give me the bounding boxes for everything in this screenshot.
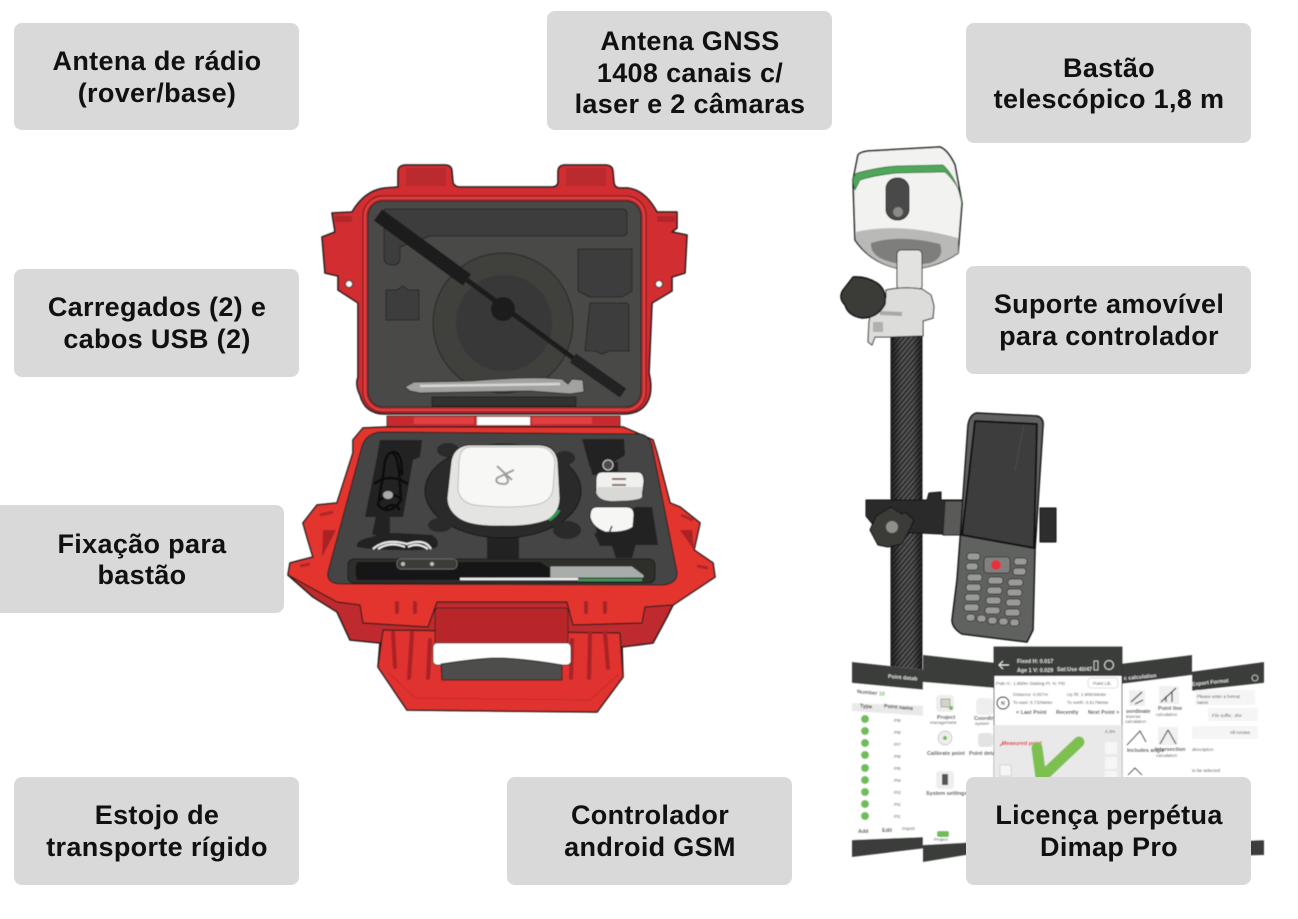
case lid: [322, 165, 687, 414]
app screen: stakeout map: N: [1001, 701, 1005, 707]
app screen: point database: Pt2: [894, 802, 901, 807]
app screen: export format: Export Format: [1192, 678, 1229, 688]
label: android controller: [507, 777, 792, 885]
app screen: stakeout map: 4.3m: [1105, 729, 1115, 734]
tray with controller handle and rod: [348, 559, 655, 583]
label: android controller: Controlador: [571, 800, 729, 830]
app screen: calculation menu: Point line: [1158, 706, 1182, 712]
app screen: point database: Pt9: [894, 718, 901, 723]
label: pole mount: [0, 505, 284, 613]
label: pole mount: bastão: [97, 560, 187, 590]
controller bracket: [866, 492, 1056, 547]
app screen: stakeout map: < Last Point: [1016, 710, 1047, 716]
app screen: export format: Please enter a format: [1197, 694, 1241, 699]
app screen: stakeout map: Pole H.: 1.800m Staking Pt. N: Pt0: [996, 681, 1066, 686]
label: android controller: android GSM: [564, 832, 736, 862]
label: radio antenna: (rover/base): [78, 78, 236, 108]
green check mark: [1037, 742, 1079, 778]
app screen: project menu: Calibrate point: [927, 751, 965, 757]
label: telescopic pole: Bastão: [1063, 53, 1155, 83]
label: GNSS antenna: Antena GNSS: [600, 26, 780, 56]
app screen: stakeout map: To east: 0.732Meter: [1013, 700, 1053, 705]
app screen: point database: Pt6: [894, 754, 901, 759]
app screen: export format: [1190, 662, 1264, 857]
label: controller holder: Suporte amovível: [994, 289, 1224, 319]
illustration: software screenshots: [852, 647, 1264, 872]
keypad: [964, 553, 1027, 626]
handle: [378, 630, 623, 712]
label: controller holder: para controlador: [999, 321, 1219, 351]
app screen: export format: to be selected: [1192, 768, 1221, 773]
app screen: calculation menu: Intersection: [1155, 747, 1186, 753]
app screen: project menu: Point details: [969, 751, 1001, 757]
knob: [841, 277, 885, 318]
label: hard case: [14, 777, 299, 885]
app screen: calculation menu: [1120, 655, 1192, 870]
label: radio antenna: Antena de rádio: [53, 46, 261, 76]
app screen: export format: description: [1192, 747, 1214, 752]
illustration: rover pole with receiver and controller: [841, 147, 1056, 670]
app screen: stakeout map: Point Lib.: [1093, 681, 1112, 686]
app screen: point database: Pt5: [894, 766, 901, 771]
antenna cradle: [425, 443, 581, 539]
rover head: [841, 147, 962, 345]
app screen: calculation menu: calculation: [1156, 712, 1178, 717]
label: pole mount: Fixação para: [57, 529, 227, 559]
app screen: stakeout map: Age 1 V: 0.029: [1017, 668, 1053, 674]
label: GNSS antenna: 1408 canais c/: [597, 58, 783, 88]
app screen: point database: Add: [858, 829, 868, 835]
label: controller holder: [966, 266, 1251, 374]
green band: [853, 165, 962, 203]
app screen: calculation menu: inverse: [1126, 714, 1141, 719]
app screen: stakeout map: Fixed H: 0.017: [1017, 659, 1053, 665]
case hinge: [387, 416, 620, 428]
base foam: [328, 432, 677, 585]
app screen: calculation menu: oordinate: [1126, 709, 1151, 715]
app screen: point database: Type: [860, 703, 872, 710]
label: software licence: Licença perpétua: [995, 800, 1223, 830]
app screen: stakeout map: Next Point >: [1088, 710, 1119, 716]
app screen: stakeout map: Sat:Use 40/47: [1057, 667, 1092, 673]
lid foam: [368, 201, 641, 407]
case base: [288, 427, 715, 712]
label: telescopic pole: telescópico 1,8 m: [994, 84, 1224, 114]
app screen: project menu: System settings: [926, 791, 967, 797]
app screen: project menu: Project: [934, 837, 949, 842]
app screen: stakeout map: [994, 647, 1122, 872]
app screen: point database: Pt3: [894, 790, 901, 795]
label: hard case: transporte rígido: [46, 832, 268, 862]
app screen: point database: Point name: [884, 704, 913, 712]
app screen: point database: Pt4: [894, 778, 901, 783]
label: chargers and cables: Carregados (2) e: [48, 292, 266, 322]
app screen: project menu: Project: [937, 715, 955, 721]
label: software licence: Dimap Pro: [1040, 832, 1178, 862]
app screen: calculation menu: Includes angle: [1127, 748, 1164, 754]
antenna stem recess: [487, 535, 519, 560]
app screen: point database: [852, 662, 926, 857]
base rim: [288, 427, 715, 627]
app screen: project menu: system: [975, 721, 990, 726]
label: chargers and cables: [14, 269, 299, 377]
app screen: calculation menu: calculation: [1156, 753, 1178, 758]
app screen: point database: Point datab: [888, 674, 918, 683]
app screen: point database: Number 10: [857, 689, 885, 698]
chargers: [582, 439, 658, 558]
label: GNSS antenna: laser e 2 câmaras: [575, 89, 805, 119]
label: software licence: [966, 777, 1251, 885]
app screen: export format: name: [1197, 700, 1209, 705]
label: hard case: Estojo de: [95, 800, 219, 830]
cable recess: [357, 440, 438, 550]
app screen: stakeout map: Distance: 0.957m: [1013, 692, 1048, 697]
app screen: point database: Import: [902, 826, 916, 831]
stem: [897, 250, 922, 290]
illustration: open red hard case: [288, 165, 715, 712]
app screen: stakeout map: Recently: [1056, 710, 1078, 716]
clamp: [868, 288, 934, 345]
controller handset: [952, 413, 1043, 642]
app screen: point database: Pt8: [894, 730, 901, 735]
app screen: point database: Edit: [882, 828, 892, 834]
label: telescopic pole: [966, 23, 1251, 143]
app screen: stakeout map: Measured point: [1002, 741, 1042, 747]
tube in lid: [405, 378, 584, 394]
GNSS antenna: [447, 445, 560, 526]
app screen: calculation menu: calculation: [1125, 719, 1147, 724]
app screen: export format: All Arrows: [1230, 730, 1251, 735]
telescopic pole in lid: [378, 215, 623, 393]
carbon pole: [891, 330, 922, 670]
app screen: project menu: management: [930, 720, 957, 725]
app screen: stakeout map: Up fill: 1.9091Meter: [1067, 692, 1107, 697]
foam slot below tube: [432, 397, 576, 406]
label: GNSS antenna: [547, 11, 832, 130]
app screen: point database: Pt7: [894, 742, 901, 747]
camera window: [886, 178, 909, 220]
app screen: project menu: [923, 655, 1002, 862]
app screen: point database: Pt1: [894, 814, 901, 819]
app screen: calculation menu: c calculation: [1124, 673, 1157, 682]
app screen: export format: File suffix: .shx: [1212, 713, 1242, 718]
label: radio antenna: [14, 23, 299, 130]
app screen: stakeout map: To north: 0.617Meter: [1067, 700, 1109, 705]
app screen: project menu: Coordinate: [974, 716, 1002, 722]
label: chargers and cables: cabos USB (2): [63, 324, 251, 354]
